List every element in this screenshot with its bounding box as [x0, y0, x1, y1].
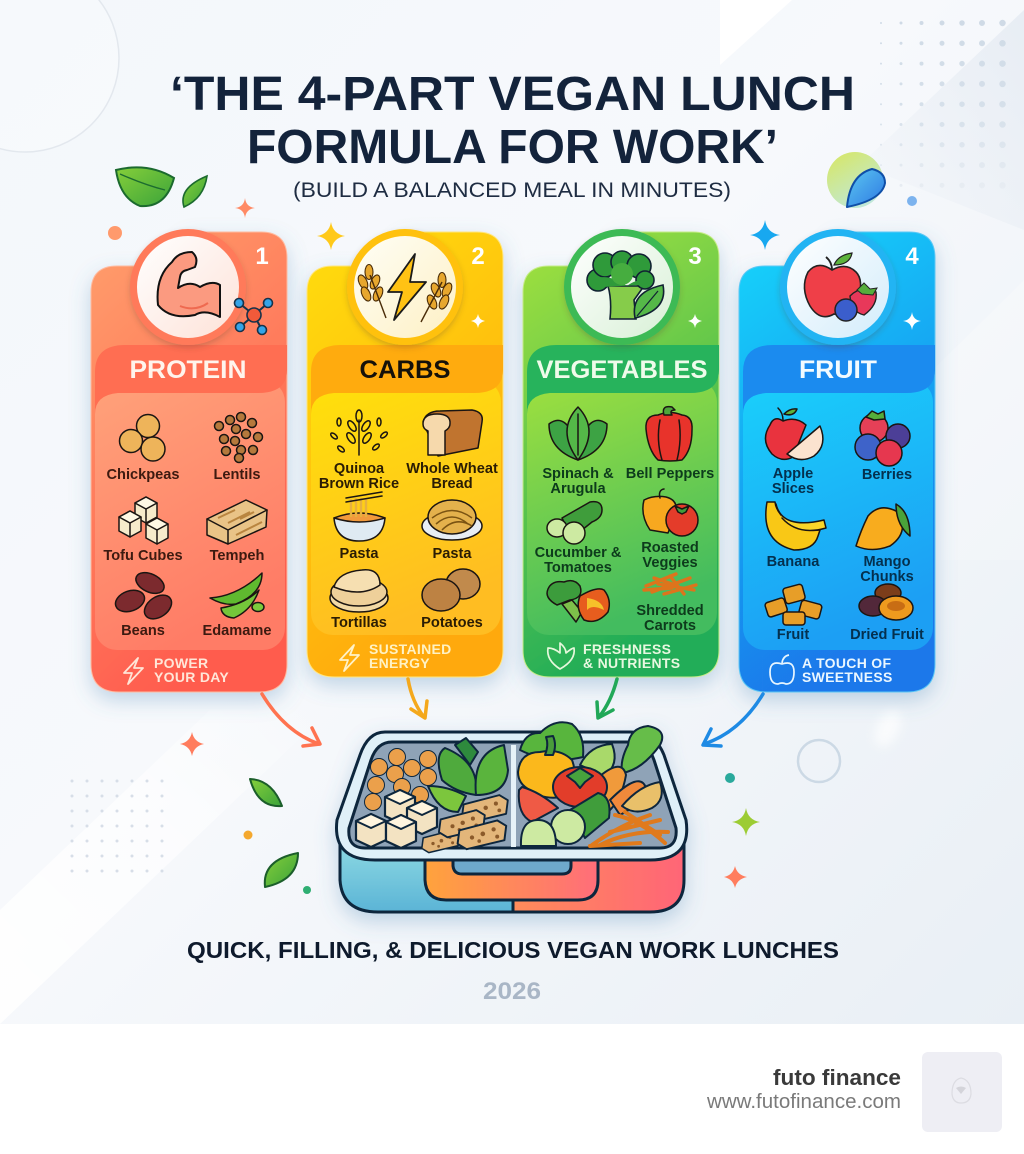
arrow: protein to lunchbox [262, 694, 320, 746]
footer: freshness and nutrients: FRESHNESS [583, 641, 671, 657]
heading: fruit: FRUIT [799, 356, 877, 384]
number 4: 4 [905, 243, 919, 270]
sparkle [688, 314, 702, 328]
item: berries: Berries [862, 467, 912, 483]
item: tortillas: Tortillas [331, 615, 387, 631]
footer: power your day [124, 655, 229, 685]
footer: sustained energy [340, 641, 452, 671]
sparkle [471, 314, 485, 328]
logo tile [922, 1052, 1002, 1132]
item: pasta plate [422, 500, 482, 562]
item: tempeh: Tempeh [210, 548, 265, 564]
item: whole wheat bread: Whole Wheat [406, 461, 498, 477]
lunchbox tray [349, 742, 676, 848]
item: bell peppers [626, 407, 714, 482]
item: whole wheat bread: Bread [431, 476, 473, 492]
brand name: futo finance [773, 1065, 901, 1090]
footer: a touch of sweetness [770, 655, 893, 685]
item: tortillas [330, 570, 388, 631]
panel: fruit [739, 229, 935, 692]
icon: vegetables badge [564, 229, 680, 345]
item: banana: Banana [767, 554, 820, 570]
item: beans: Beans [121, 623, 165, 639]
footer: power your day: POWER [154, 655, 208, 671]
footer: sustained energy: ENERGY [369, 655, 430, 671]
right compartment food [518, 722, 668, 846]
decorative leaves top left [116, 167, 207, 207]
item: cucumber and tomatoes [535, 502, 622, 576]
item: beans [112, 569, 176, 639]
item: cucumber and tomatoes: Cucumber & [535, 545, 622, 561]
item: pasta bowl [334, 492, 385, 562]
item: dried fruit [850, 584, 924, 643]
brand footer [706, 1052, 1002, 1132]
item: pasta bowl: Pasta [340, 546, 379, 562]
item: quinoa and brown rice [319, 410, 399, 492]
item: edamame: Edamame [203, 623, 271, 639]
item: chickpeas: Chickpeas [106, 467, 180, 483]
heading: carbs: CARBS [360, 356, 450, 384]
arrow: carbs to lunchbox [408, 679, 427, 718]
item: pasta plate: Pasta [433, 546, 472, 562]
item: potatoes [421, 569, 483, 631]
item: whole wheat bread [406, 410, 498, 492]
item: dried fruit chunks [764, 584, 822, 643]
item: spinach and arugula: Arugula [550, 481, 606, 497]
item: chickpeas [106, 414, 180, 483]
arrow: vegetables to lunchbox [597, 679, 617, 718]
lunchbox base [340, 840, 684, 912]
item: cucumber and tomatoes: Tomatoes [544, 560, 612, 576]
item: roasted veggies: Veggies [642, 555, 698, 571]
item: bell peppers: Bell Peppers [626, 466, 714, 482]
item: dried fruit: Dried Fruit [850, 627, 924, 643]
item: mango chunks [856, 504, 914, 585]
heading: vegetables: VEGETABLES [536, 356, 708, 384]
item: tofu cubes [103, 497, 183, 564]
icon: fruit badge [780, 229, 896, 345]
year: 2026 [483, 978, 541, 1005]
item: potatoes: Potatoes [421, 615, 483, 631]
panel: protein [91, 229, 287, 692]
title: ‘THE 4-PART VEGAN LUNCH [170, 67, 855, 121]
item: spinach and arugula [542, 407, 614, 497]
divider [511, 745, 516, 847]
footer: freshness and nutrients: & NUTRIENTS [583, 655, 680, 671]
lunchbox illustration [336, 722, 687, 912]
lunchbox rim [336, 732, 687, 860]
title: FORMULA FOR WORK’ [247, 120, 778, 174]
item: apple slices: Apple [773, 466, 813, 482]
heading: protein: PROTEIN [130, 356, 246, 384]
item: shredded carrots [636, 574, 704, 634]
subtitle: (BUILD A BALANCED MEAL IN MINUTES) [293, 179, 731, 202]
item: mango chunks: Chunks [860, 569, 914, 585]
item: lentils: Lentils [213, 467, 261, 483]
decorative sparkles and dots [108, 198, 840, 894]
item: roasted veggies: Roasted [641, 540, 699, 556]
decorative fruit and droplet top right [827, 152, 917, 208]
tagline: QUICK, FILLING, & DELICIOUS VEGAN WORK LUNCHES [187, 937, 839, 963]
footer: a touch of sweetness: A TOUCH OF [802, 655, 891, 671]
item: roasted veggies [641, 489, 699, 571]
item: quinoa and brown rice: Quinoa [334, 461, 385, 477]
icon: carbs badge [347, 229, 463, 345]
item: mango chunks: Mango [863, 554, 911, 570]
sparkle [903, 312, 921, 330]
panel: vegetables [523, 229, 719, 677]
footer: freshness and nutrients [548, 641, 680, 671]
item: apple slices: Slices [772, 481, 814, 497]
title [170, 67, 855, 174]
arrow: fruit to lunchbox [703, 694, 763, 746]
footer: sustained energy: SUSTAINED [369, 641, 452, 657]
item: shredded carrots: Shredded [636, 603, 704, 619]
item: berries [855, 411, 912, 483]
item: tempeh [207, 500, 267, 564]
item: roasted broccoli and pepper [547, 581, 609, 622]
item: apple slices [765, 408, 823, 497]
left compartment food [356, 738, 508, 853]
panel: carbs [307, 229, 503, 677]
icon: molecule [234, 298, 272, 334]
item: spinach and arugula: Spinach & [542, 466, 614, 482]
item: edamame [203, 573, 271, 639]
footer: a touch of sweetness: SWEETNESS [802, 669, 893, 685]
number 2: 2 [471, 243, 485, 270]
item: lentils [213, 412, 262, 483]
item: quinoa and brown rice: Brown Rice [319, 476, 399, 492]
number 1: 1 [255, 243, 269, 270]
item: banana [766, 502, 826, 570]
brand url: www.futofinance.com [706, 1091, 901, 1113]
item: dried fruit chunks: Fruit [777, 627, 809, 643]
item: shredded carrots: Carrots [644, 618, 696, 634]
icon: protein badge [130, 229, 246, 345]
number 3: 3 [688, 243, 702, 270]
item: tofu cubes: Tofu Cubes [103, 548, 183, 564]
footer: power your day: YOUR DAY [154, 669, 229, 685]
